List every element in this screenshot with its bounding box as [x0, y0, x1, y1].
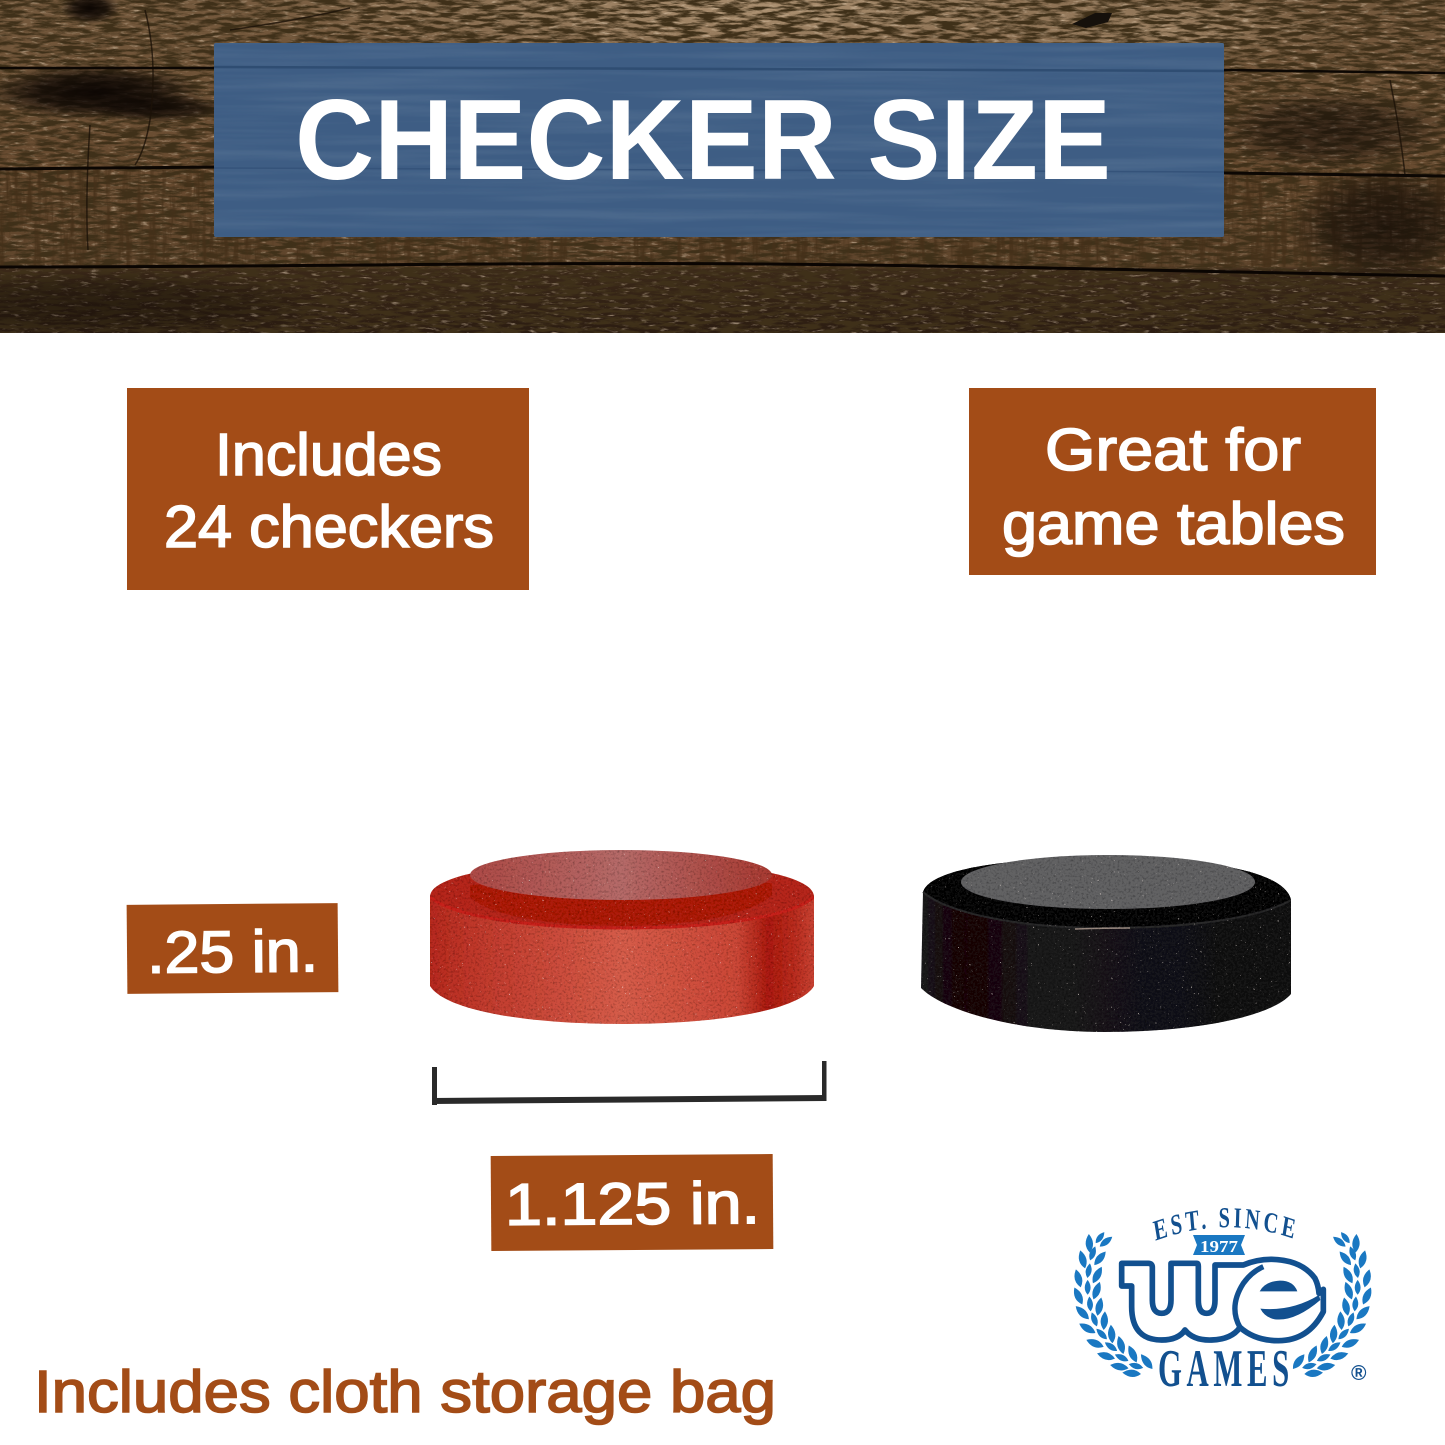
black checker — [921, 855, 1291, 1032]
wood banner background — [0, 0, 1445, 340]
registered mark: ® — [1351, 1362, 1367, 1385]
logo: WE Games — [1074, 1208, 1372, 1398]
callout: includes 24 checkers: 24 checkers — [164, 494, 494, 560]
callout: includes 24 checkers — [127, 388, 529, 590]
logo text: games: GAMES — [1158, 1340, 1294, 1398]
dimension bracket — [432, 1061, 826, 1105]
logo text: est. since: EST. SINCE — [1152, 1208, 1295, 1241]
badge: 1977: 1977 — [1200, 1237, 1239, 1256]
callout: great for game tables: Great for — [1045, 417, 1301, 483]
callout: height .25 in.: .25 in. — [147, 918, 318, 986]
callout: great for game tables: game tables — [1002, 491, 1345, 557]
footer note: Includes cloth storage bag — [34, 1359, 776, 1425]
callout: width 1.125 in.: 1.125 in. — [505, 1170, 760, 1238]
callout: includes 24 checkers: Includes — [215, 422, 442, 488]
icon: laurel wreath — [1071, 1230, 1374, 1378]
callout: great for game tables — [969, 388, 1376, 575]
title: CHECKER SIZE — [295, 77, 1111, 204]
badge: 1977 — [1193, 1235, 1245, 1256]
callout: width 1.125 in. — [491, 1154, 773, 1251]
title banner — [214, 43, 1224, 237]
callout: height .25 in. — [127, 903, 338, 994]
logo wordmark: we — [1122, 1259, 1323, 1341]
red checker — [430, 850, 814, 1024]
